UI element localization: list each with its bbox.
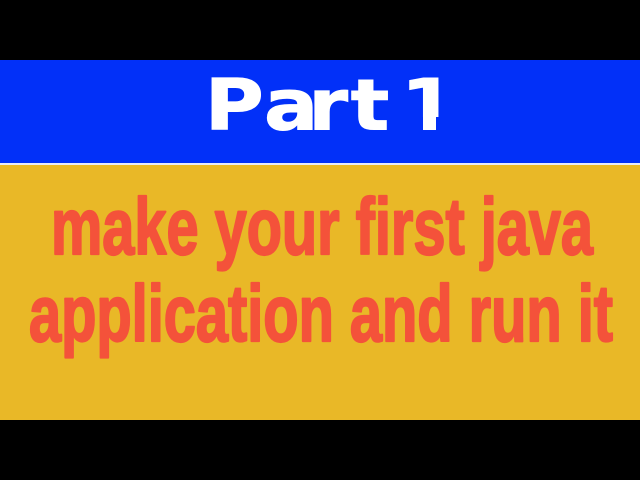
bottom black bar	[0, 420, 640, 480]
panel: yellow body	[0, 165, 640, 420]
top black bar	[0, 0, 640, 60]
panel: blue header	[0, 60, 640, 163]
heading: Part 1: Part 1	[205, 65, 457, 146]
white divider	[0, 163, 640, 165]
